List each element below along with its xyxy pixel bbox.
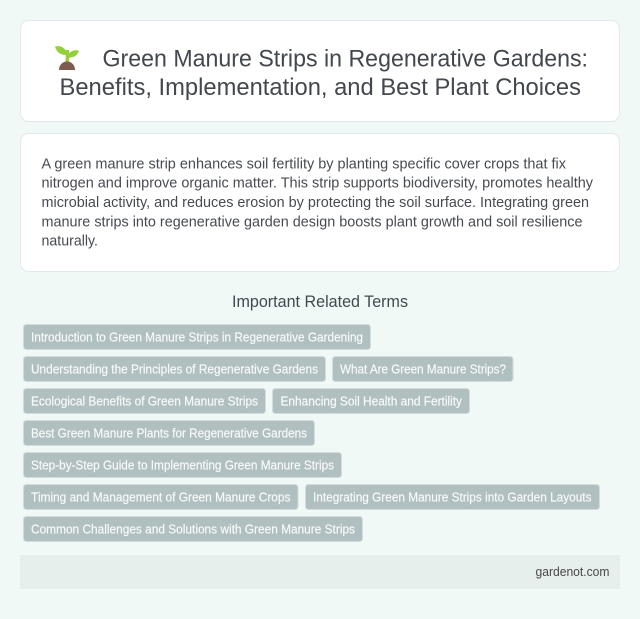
tag: introduction — [24, 324, 370, 350]
footer source: gardenot.com — [536, 565, 610, 579]
tag: ecological benefits: Ecological Benefits of Green Manure Strips — [31, 394, 258, 408]
tag: challenges: Common Challenges and Solutions with Green Manure Strips — [31, 522, 355, 536]
description text — [42, 156, 594, 250]
tag: what are strips — [332, 356, 513, 382]
tag: what are strips: What Are Green Manure Strips? — [340, 362, 506, 376]
tag: challenges — [24, 516, 362, 542]
title: Green Manure Strips in Regenerative Gardens: — [102, 46, 588, 72]
tag: step-by-step: Step-by-Step Guide to Implementing Green Manure Strips — [31, 458, 334, 472]
footer bar — [20, 555, 620, 589]
title — [60, 46, 588, 101]
tag: step-by-step — [24, 452, 342, 478]
description text: manure strips into regenerative garden design boosts plant growth and soil resilience — [42, 214, 582, 230]
description text: nitrogen and improve organic matter. This strip supports biodiversity, promotes healthy — [42, 176, 594, 192]
tag: timing: Timing and Management of Green Manure Crops — [31, 490, 290, 504]
description text: naturally. — [42, 234, 98, 250]
heading: related terms: Important Related Terms — [232, 293, 408, 311]
tag: principles: Understanding the Principles of Regenerative Gardens — [31, 362, 318, 376]
tag: principles — [24, 356, 326, 382]
tag: best plants: Best Green Manure Plants for Regenerative Gardens — [31, 426, 307, 440]
tag: soil health — [272, 388, 470, 414]
panel: description card — [20, 134, 620, 272]
icon: seedling — [55, 46, 79, 70]
tag: soil health: Enhancing Soil Health and Fertility — [280, 394, 463, 408]
tag: integrating: Integrating Green Manure Strips into Garden Layouts — [313, 490, 592, 504]
tag: integrating — [306, 484, 600, 510]
title: Benefits, Implementation, and Best Plant Choices — [60, 74, 581, 101]
tag: timing — [24, 484, 298, 510]
tag: introduction: Introduction to Green Manure Strips in Regenerative Gardening — [31, 330, 363, 344]
related terms tags — [24, 324, 600, 542]
description text: A green manure strip enhances soil fertility by planting specific cover crops that fix — [42, 156, 567, 172]
description text: microbial activity, and reduces erosion by protecting the soil surface. Integrating green — [42, 195, 589, 211]
panel: title card — [20, 20, 620, 122]
tag: best plants — [24, 420, 314, 446]
tag: ecological benefits — [24, 388, 266, 414]
